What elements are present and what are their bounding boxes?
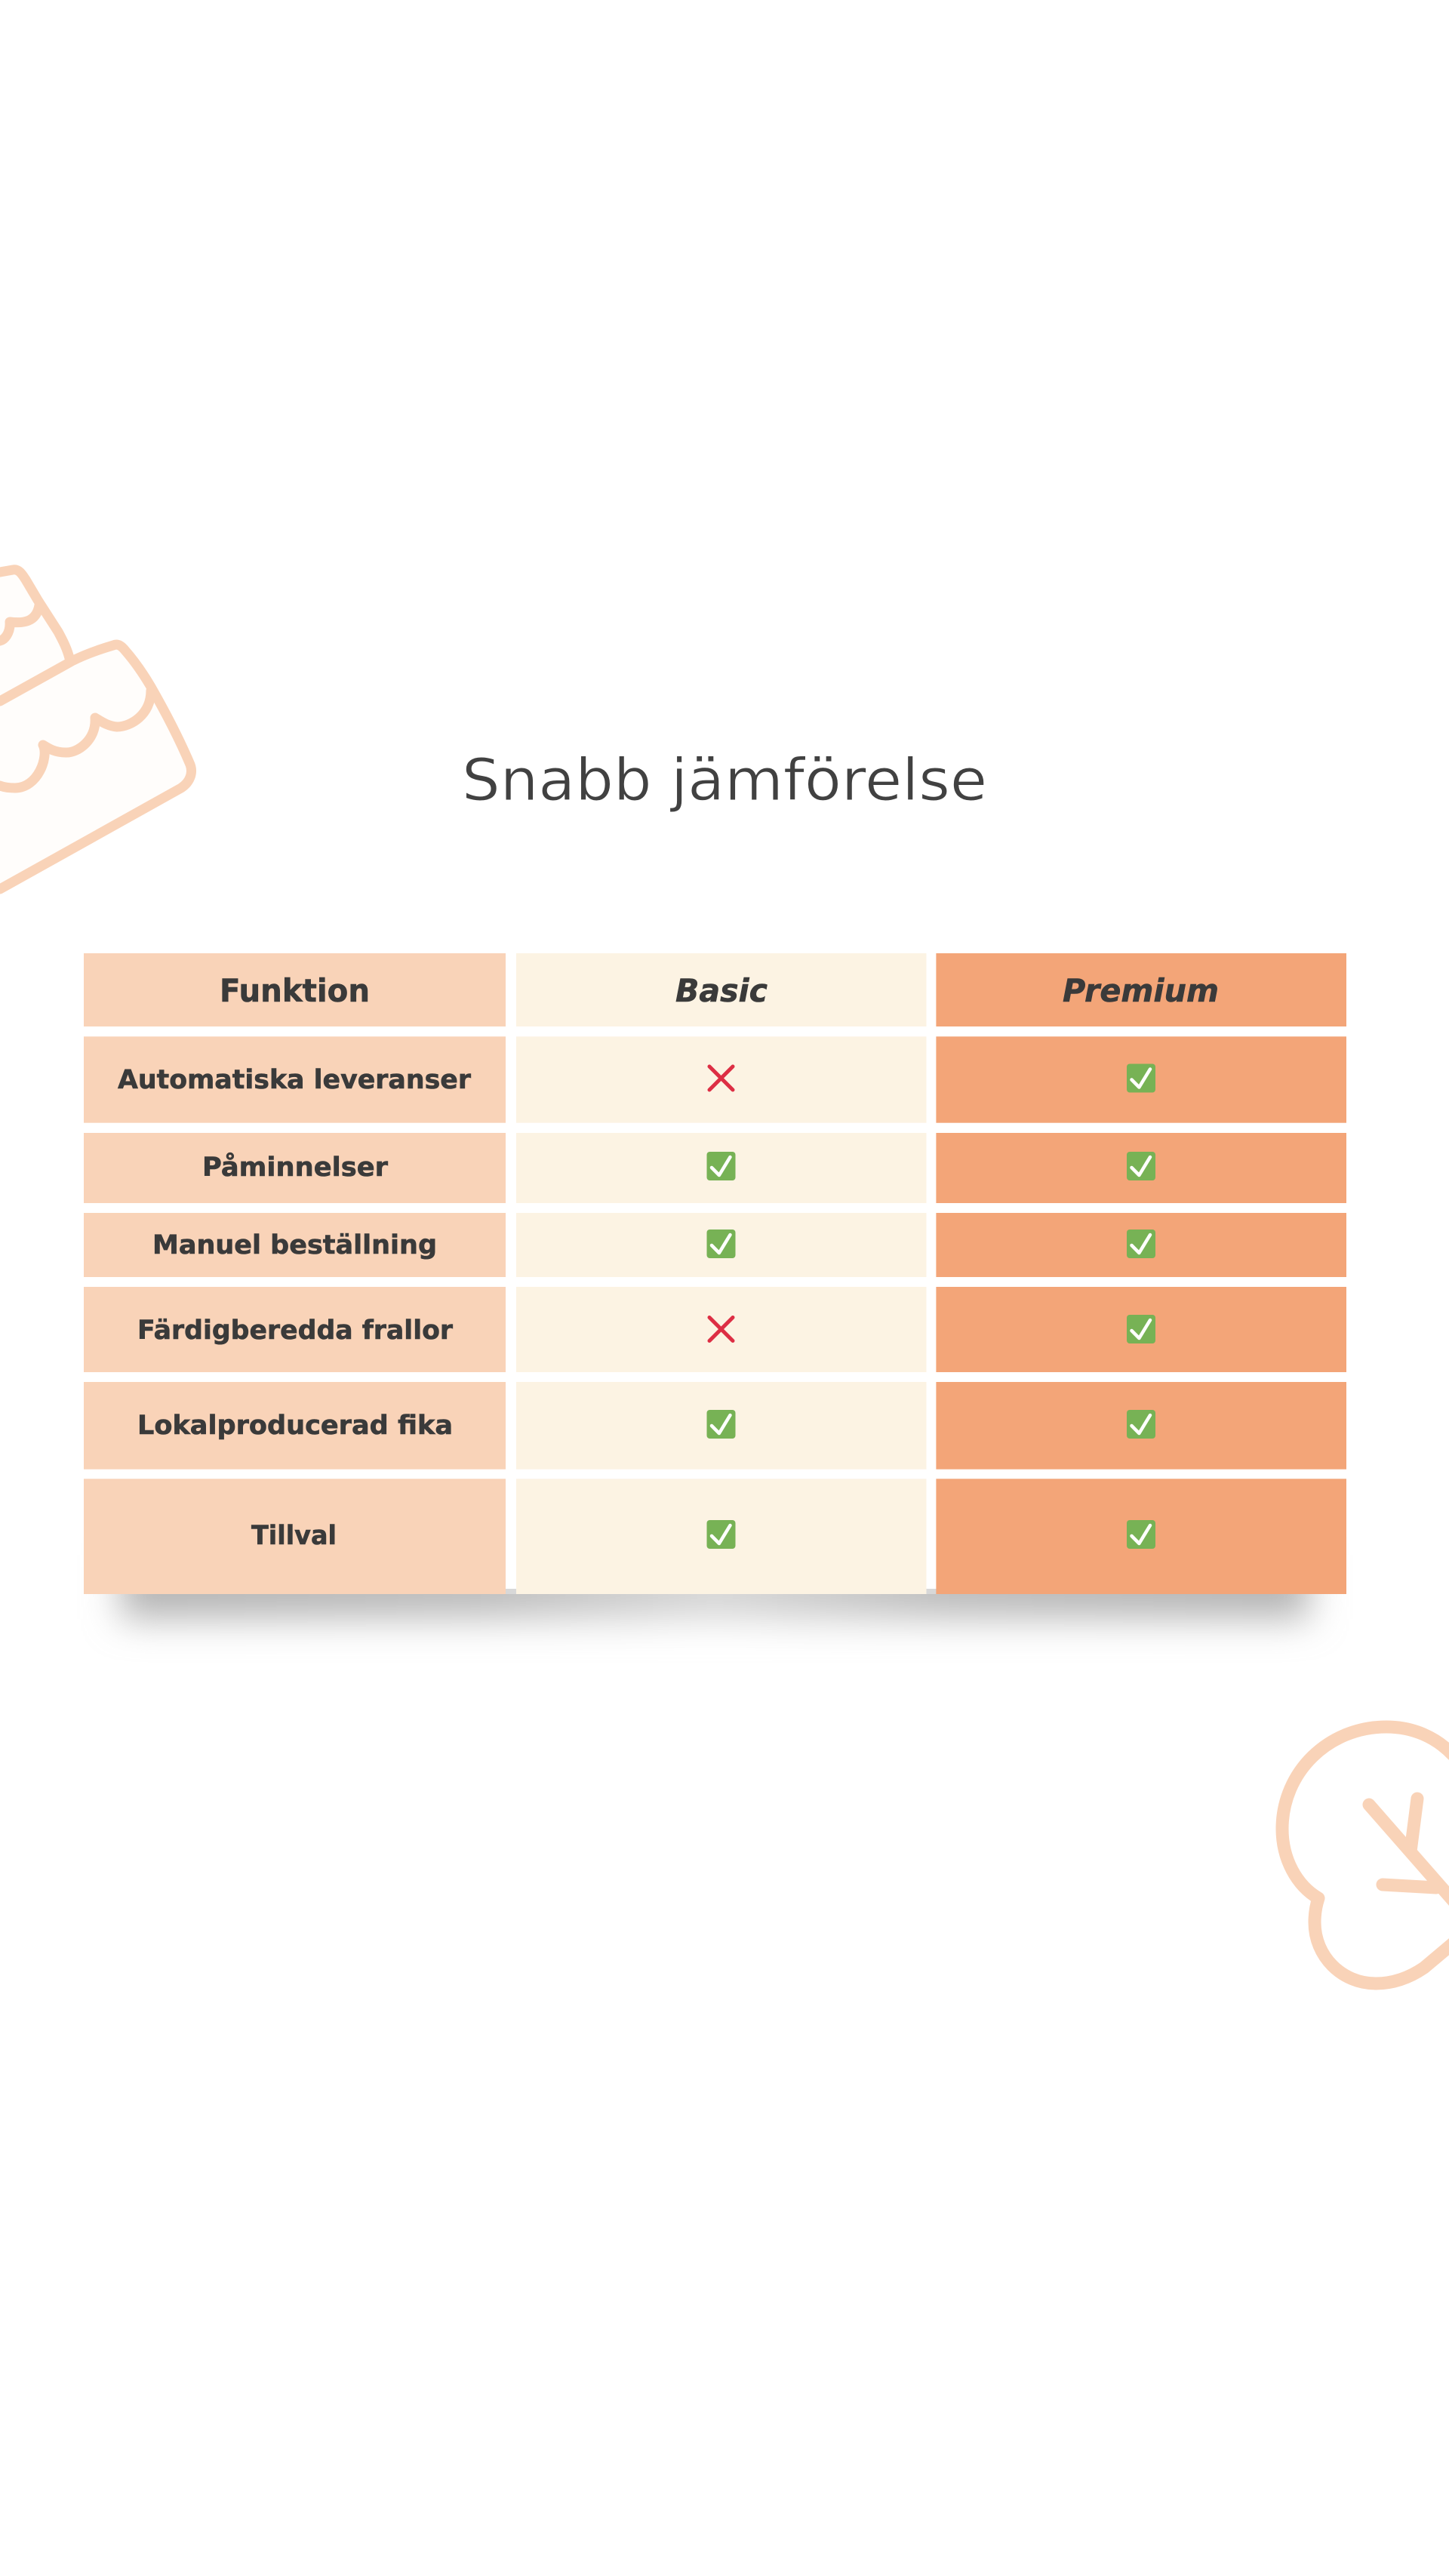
title: Snabb jämförelse xyxy=(462,747,987,814)
column: Basic xyxy=(516,953,927,1594)
table shadow xyxy=(84,953,1346,1619)
icon: layered cake decoration xyxy=(0,570,192,889)
column: Funktion: Funktion xyxy=(220,972,370,1009)
column: Basic: Basic xyxy=(675,972,768,1009)
column: Funktion: Automatiska leveranser xyxy=(118,1065,472,1095)
column: Funktion: Manuel beställning xyxy=(152,1230,437,1260)
comparison table xyxy=(84,953,1346,1594)
column: Premium: Premium xyxy=(1063,972,1219,1009)
column: Funktion: Lokalproducerad fika xyxy=(137,1411,453,1441)
column: Funktion xyxy=(84,953,506,1594)
icon: croissant decoration xyxy=(1282,1727,1449,1984)
column: Funktion: Tillval xyxy=(251,1521,337,1551)
column: Premium xyxy=(936,953,1346,1594)
column: Funktion: Färdigberedda frallor xyxy=(137,1316,454,1346)
column: Funktion: Påminnelser xyxy=(202,1152,389,1183)
